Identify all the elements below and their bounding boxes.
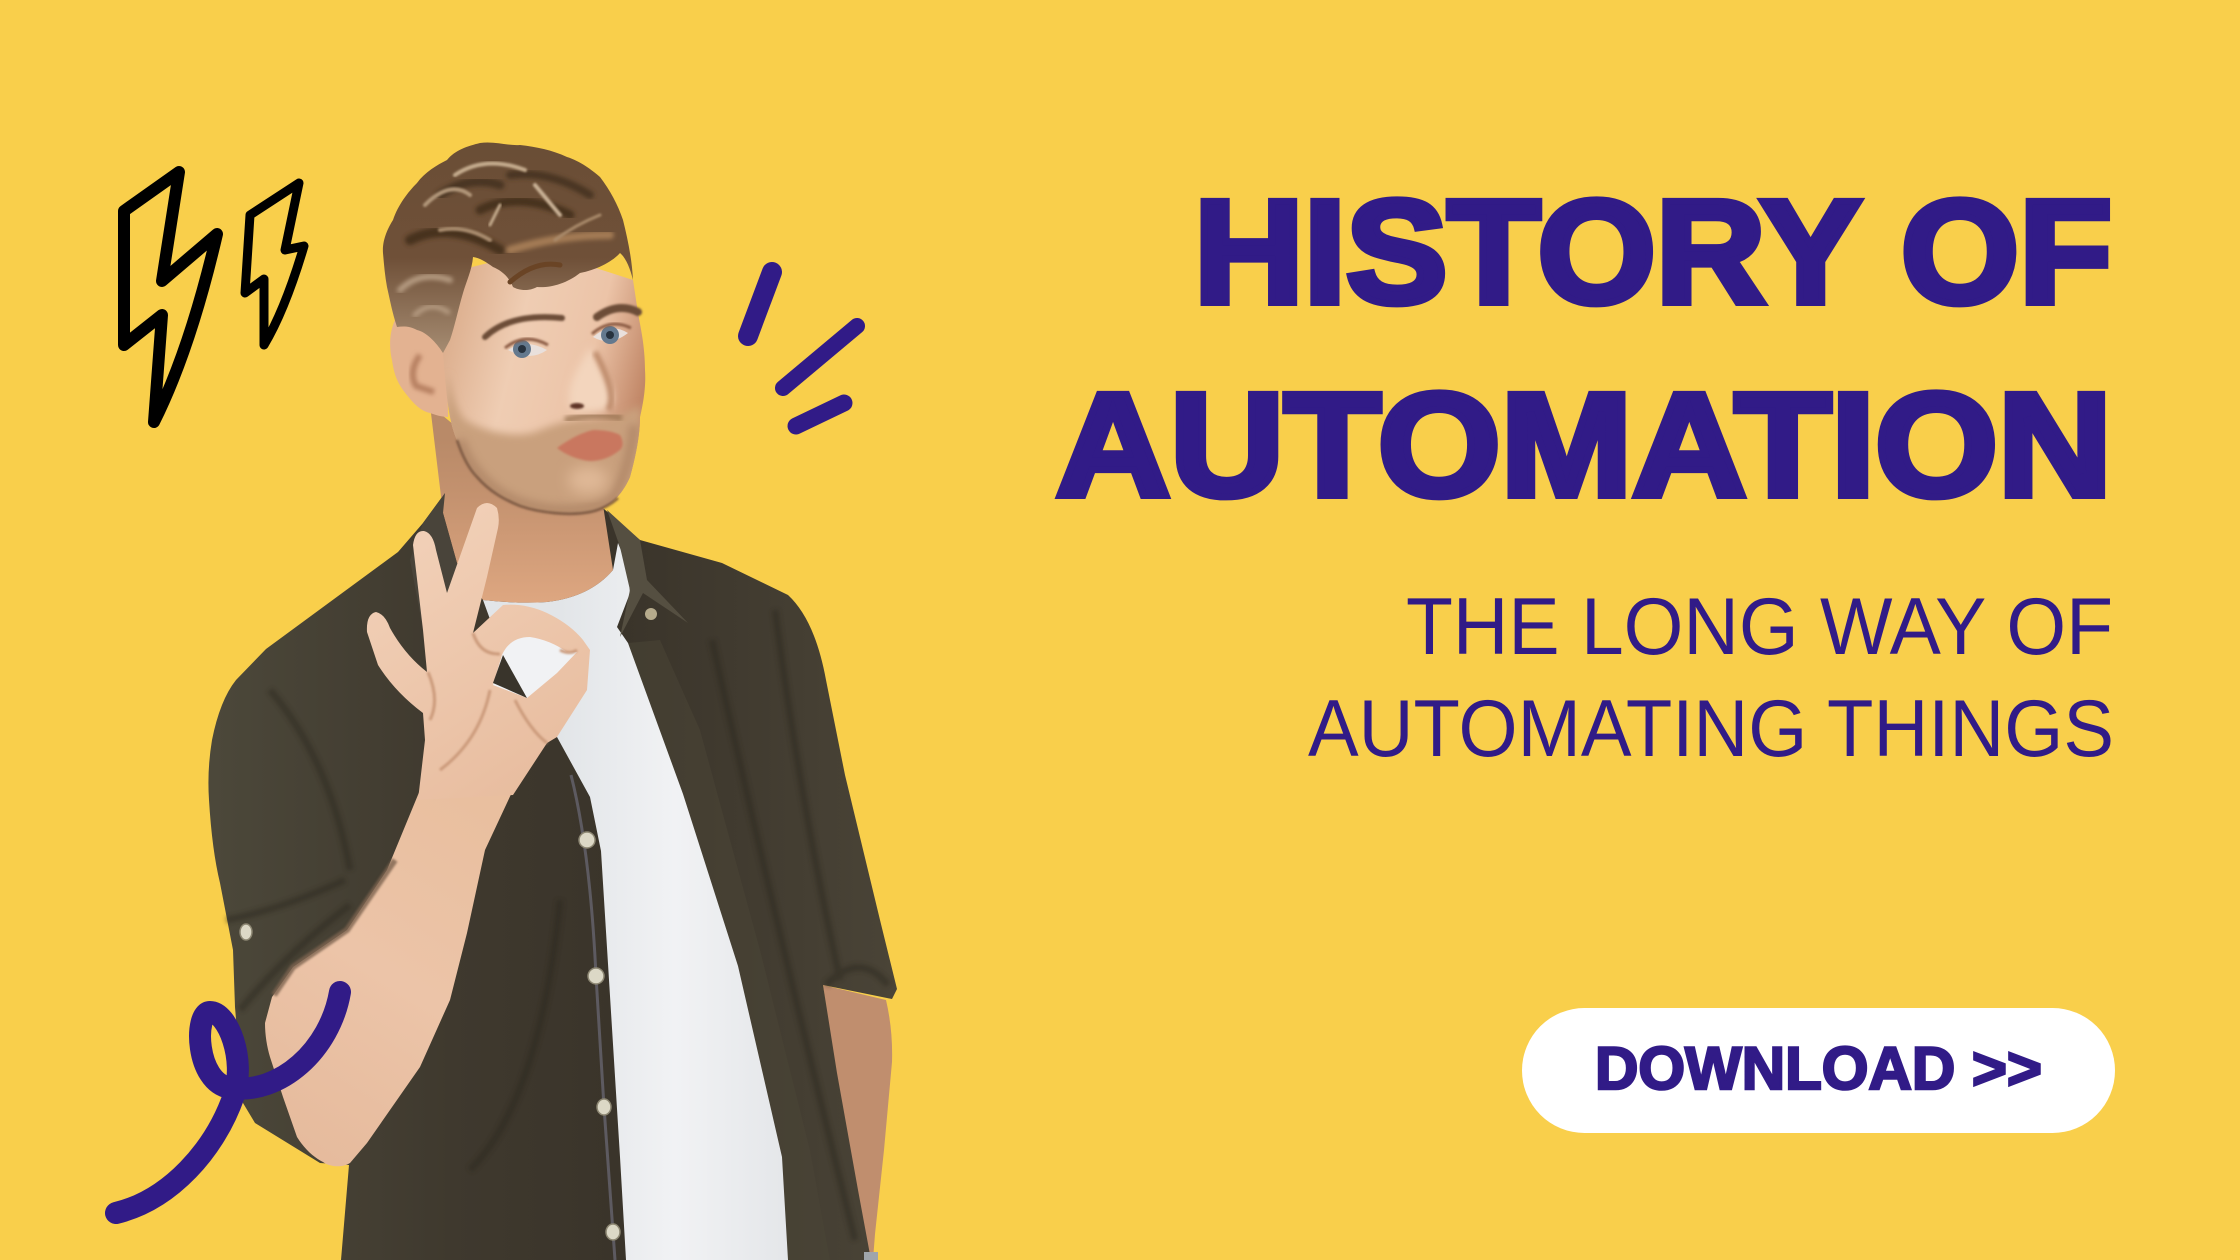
shirt folds bbox=[226, 610, 888, 1240]
title line 2: AUTOMATION bbox=[1056, 364, 2112, 528]
banner canvas bbox=[105, 142, 2115, 1260]
subtitle line 1: THE LONG WAY OF bbox=[1406, 582, 2113, 672]
icon: purple loop squiggle bbox=[116, 992, 340, 1213]
shirt placket line bbox=[571, 775, 615, 1260]
finger creases bbox=[428, 633, 577, 770]
face shading clipped to face bbox=[446, 386, 642, 514]
stubble shadow at jaw bbox=[460, 425, 634, 510]
dark olive shirt bbox=[208, 493, 897, 1260]
hand OK gesture bbox=[367, 503, 590, 800]
icon: three purple accent strokes bbox=[748, 272, 857, 426]
stubble bbox=[446, 386, 642, 512]
right forearm bbox=[823, 985, 892, 1260]
collar button bbox=[645, 608, 657, 620]
icon: two black lightning bolts bbox=[124, 172, 304, 422]
ring hole showing t-shirt bbox=[493, 637, 577, 698]
shirt seen through ring bbox=[493, 655, 527, 698]
person giving OK sign bbox=[208, 143, 897, 1260]
download button bbox=[1522, 1008, 2115, 1133]
sleeve hem shadow bbox=[274, 860, 395, 995]
eyes bbox=[505, 324, 631, 358]
eyebrows bbox=[485, 308, 638, 337]
shirt buttons bbox=[240, 832, 620, 1240]
left collar bbox=[410, 493, 470, 700]
right collar bbox=[607, 510, 688, 637]
button pill bbox=[1522, 1008, 2115, 1133]
title bbox=[1056, 170, 2112, 528]
watch strap at bottom right bbox=[864, 1252, 878, 1260]
lips bbox=[557, 430, 623, 461]
title line 1: HISTORY OF bbox=[1194, 170, 2112, 334]
raised forearm bbox=[265, 790, 513, 1166]
jaw line bbox=[457, 440, 618, 514]
button label: DOWNLOAD >> bbox=[1595, 1035, 2042, 1102]
chin highlight bbox=[568, 466, 608, 494]
subtitle bbox=[1308, 582, 2114, 774]
white t-shirt bbox=[483, 543, 788, 1260]
face bbox=[443, 250, 645, 514]
moustache shadow bbox=[565, 415, 622, 420]
subtitle line 2: AUTOMATING THINGS bbox=[1308, 684, 2114, 774]
ear shading bbox=[413, 355, 434, 392]
ear bbox=[390, 320, 448, 417]
hair strands bbox=[400, 164, 610, 315]
hair bbox=[383, 143, 633, 353]
nose bbox=[569, 347, 613, 412]
neck bbox=[430, 405, 613, 603]
lighter placket panel bbox=[628, 640, 830, 1260]
